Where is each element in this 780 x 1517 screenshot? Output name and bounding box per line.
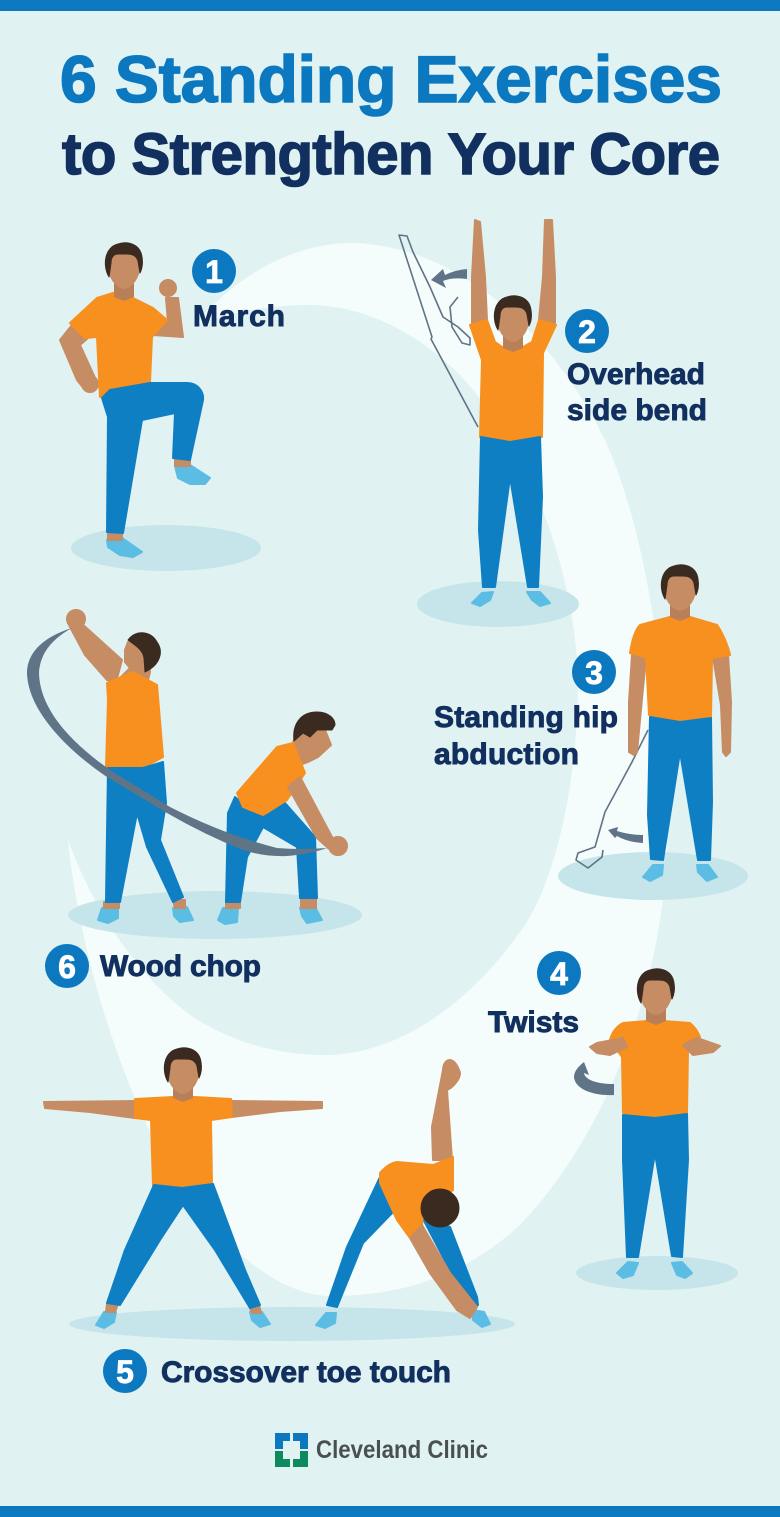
- white swoosh background: [68, 243, 668, 1296]
- exercise 2: overhead side bend figure: [399, 220, 579, 627]
- label 2: Overhead: [567, 358, 705, 391]
- label 2: side bend: [567, 394, 707, 427]
- label 1: [192, 249, 285, 333]
- outline of bent arm: [399, 235, 478, 427]
- label 5: Crossover toe touch: [161, 1356, 451, 1389]
- label 3: 3: [585, 655, 603, 691]
- arrow: leg direction: [608, 827, 643, 843]
- outline of raised leg: [576, 730, 648, 868]
- label 4: 4: [550, 956, 568, 992]
- label 1: March: [193, 300, 285, 333]
- label 4: [488, 951, 581, 1039]
- label 2: [565, 309, 707, 427]
- label 3: abduction: [434, 738, 579, 771]
- label 6: 6: [58, 949, 76, 985]
- standing figure: [44, 1048, 322, 1328]
- label 3: Standing hip: [434, 701, 618, 734]
- Cleveland Clinic logo: [275, 1433, 488, 1467]
- exercise 5: crossover toe touch figures: [44, 1048, 515, 1341]
- label 5: 5: [116, 1354, 134, 1390]
- label 1: 1: [205, 254, 223, 290]
- label 4: Twists: [488, 1006, 579, 1039]
- label 2: 2: [578, 314, 596, 350]
- Cleveland Clinic logo: Cleveland Clinic: [316, 1436, 488, 1464]
- label 5: [103, 1349, 451, 1393]
- exercise 4: twists figure: [574, 969, 738, 1290]
- bent figure: [218, 712, 347, 924]
- bending figure: [316, 1060, 490, 1328]
- exercise 6: wood chop figures: [27, 610, 362, 939]
- label 6: [45, 944, 261, 988]
- swing arc: [27, 628, 327, 856]
- title: [60, 42, 722, 187]
- arrow: twist direction: [574, 1062, 614, 1095]
- exercise 3: standing hip abduction figure: [558, 565, 748, 900]
- exercise 1: march figure: [60, 243, 261, 571]
- arrow: bend direction: [431, 269, 467, 288]
- title: to Strengthen Your Core: [62, 122, 720, 187]
- upright figure: [67, 610, 193, 923]
- title: 6 Standing Exercises: [60, 42, 722, 116]
- label 6: Wood chop: [100, 950, 261, 983]
- label 3: [434, 650, 618, 771]
